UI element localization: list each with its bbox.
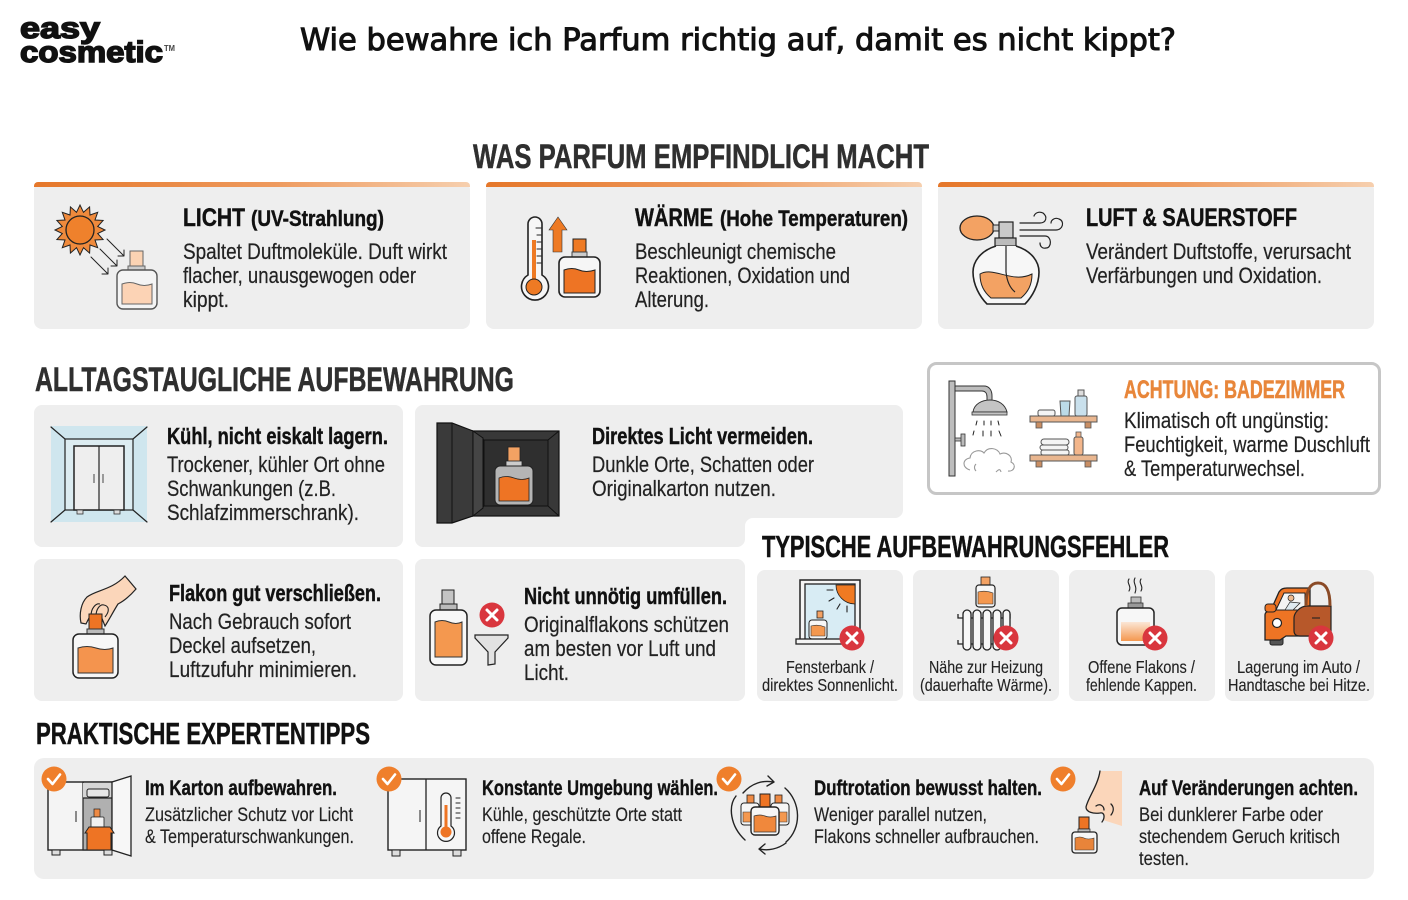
text: achtung badezimmer bbox=[1124, 376, 1370, 481]
logo bbox=[20, 12, 175, 69]
card: fensterbank bbox=[757, 570, 903, 701]
text: duftrotation: Duftrotation bewusst halten. bbox=[814, 776, 1042, 800]
text: auto und handtasche: Lagerung im Auto / bbox=[1237, 657, 1360, 677]
text: wärme: Reaktionen, Oxidation und bbox=[635, 263, 850, 288]
text: auf veränderungen achten: testen. bbox=[1139, 848, 1189, 870]
text: licht: flacher, unausgewogen oder bbox=[183, 263, 416, 288]
text: achtung badezimmer: & Temperaturwechsel. bbox=[1124, 456, 1305, 481]
icon: perfume atomizer bbox=[960, 212, 1063, 304]
icon: cabinet with thermometer bbox=[388, 779, 466, 856]
icon: cupboard with carton bbox=[48, 776, 131, 856]
icon: check bbox=[376, 766, 402, 792]
icon: thermometer and bottle bbox=[522, 217, 600, 300]
logo: cosmetic bbox=[20, 36, 163, 69]
text: kühl lagern: Trockener, kühler Ort ohne bbox=[167, 452, 385, 477]
text: im karton bbox=[145, 776, 354, 848]
icon: check bbox=[716, 766, 742, 792]
text: nicht umfüllen: Licht. bbox=[524, 660, 569, 685]
icon: nose and bottle bbox=[1072, 771, 1122, 853]
text: offene flakons bbox=[1086, 657, 1197, 695]
text: fensterbank: Fensterbank / bbox=[786, 657, 874, 677]
card: offene flakons bbox=[1069, 570, 1215, 701]
text: fensterbank bbox=[762, 657, 898, 695]
text: wärme: WÄRME bbox=[635, 204, 713, 232]
icon: wardrobe in room bbox=[51, 426, 147, 522]
icon: shelves bbox=[1030, 390, 1097, 467]
logo: easy bbox=[20, 12, 100, 45]
text: licht: kippt. bbox=[183, 287, 229, 312]
panel: expertentipps bbox=[34, 758, 1374, 879]
text: luft und sauerstoff: Verfärbungen und Oxidation. bbox=[1086, 263, 1322, 288]
title: Wie bewahre ich Parfum richtig auf, damit es nicht kippt? bbox=[300, 23, 1176, 58]
text: auf veränderungen achten bbox=[1139, 776, 1358, 870]
text: licht: LICHT bbox=[183, 204, 245, 232]
text: konstante umgebung bbox=[482, 776, 718, 848]
text: fensterbank: direktes Sonnenlicht. bbox=[762, 675, 898, 695]
text: wärme bbox=[635, 204, 908, 312]
text: achtung badezimmer: Klimatisch oft ungünstig: bbox=[1124, 408, 1329, 433]
icon: dark box with bottle bbox=[437, 423, 559, 523]
text: im karton: & Temperaturschwankungen. bbox=[145, 826, 354, 848]
heading: typische aufbewahrungsfehler: TYPISCHE AUFBEWAHRUNGSFEHLER bbox=[762, 529, 1169, 564]
icon: car and handbag bbox=[1265, 583, 1334, 650]
icon: window with sun and bottle bbox=[796, 580, 864, 650]
icon: shower bbox=[949, 381, 1014, 476]
text: im karton: Im Karton aufbewahren. bbox=[145, 776, 337, 800]
text: wärme: (Hohe Temperaturen) bbox=[720, 206, 908, 231]
text: direktes licht vermeiden: Dunkle Orte, Schatten oder bbox=[592, 452, 814, 477]
card: auto und handtasche bbox=[1225, 570, 1374, 701]
panel: luft und sauerstoff bbox=[938, 182, 1374, 329]
text: auto und handtasche bbox=[1228, 657, 1370, 695]
icon: check bbox=[1050, 766, 1076, 792]
text: auto und handtasche: Handtasche bei Hitze. bbox=[1228, 675, 1370, 695]
text: heizung: (dauerhafte Wärme). bbox=[920, 675, 1052, 695]
text: im karton: Zusätzlicher Schutz vor Licht bbox=[145, 804, 353, 826]
panel: direktes licht vermeiden bbox=[415, 405, 903, 547]
text: kühl lagern: Kühl, nicht eiskalt lagern. bbox=[167, 423, 388, 449]
text: auf veränderungen achten: stechendem Geruch kritisch bbox=[1139, 826, 1340, 848]
text: duftrotation bbox=[814, 776, 1042, 848]
text: flakon verschließen: Nach Gebrauch sofort bbox=[169, 609, 351, 634]
icon: open bottle bbox=[1117, 578, 1168, 650]
text: duftrotation: Flakons schneller aufbrauchen. bbox=[814, 826, 1039, 848]
text: kühl lagern: Schwankungen (z.B. bbox=[167, 476, 336, 501]
text: nicht umfüllen: am besten vor Luft und bbox=[524, 636, 716, 661]
heading: was parfum empfindlich macht: WAS PARFUM EMPFINDLICH MACHT bbox=[473, 138, 929, 176]
text: flakon verschließen bbox=[169, 580, 381, 682]
text: offene flakons: Offene Flakons / bbox=[1088, 657, 1195, 677]
tip: im karton bbox=[42, 766, 354, 856]
text: kühl lagern bbox=[167, 423, 388, 525]
callout: achtung badezimmer bbox=[928, 364, 1380, 494]
icon: rotating bottles bbox=[731, 776, 798, 854]
icon: hand closing bottle bbox=[73, 576, 136, 678]
card: heizung bbox=[913, 570, 1059, 701]
text: duftrotation: Weniger parallel nutzen, bbox=[814, 804, 987, 826]
text: nicht umfüllen: Originalflakons schützen bbox=[524, 612, 729, 637]
text: konstante umgebung: offene Regale. bbox=[482, 826, 586, 848]
icon: bottle on radiator bbox=[958, 577, 1018, 650]
text: konstante umgebung: Kühle, geschützte Orte statt bbox=[482, 804, 682, 826]
text: flakon verschließen: Luftzufuhr minimieren. bbox=[169, 657, 357, 682]
panel: nicht umfüllen bbox=[415, 559, 745, 701]
text: luft und sauerstoff: LUFT & SAUERSTOFF bbox=[1086, 204, 1297, 232]
text: nicht umfüllen bbox=[524, 583, 729, 685]
text: konstante umgebung: Konstante Umgebung wählen. bbox=[482, 776, 718, 800]
panel: kühl lagern bbox=[34, 405, 403, 547]
text: direktes licht vermeiden: Direktes Licht vermeiden. bbox=[592, 423, 813, 449]
heading: praktische expertentipps: PRAKTISCHE EXPERTENTIPPS bbox=[36, 716, 370, 751]
text: flakon verschließen: Deckel aufsetzen, bbox=[169, 633, 316, 658]
text: licht bbox=[183, 204, 447, 312]
text: licht: (UV-Strahlung) bbox=[251, 206, 384, 231]
logo: TM bbox=[164, 44, 175, 53]
panel: flakon verschließen bbox=[34, 559, 403, 701]
icon: check bbox=[42, 766, 66, 792]
text: wärme: Alterung. bbox=[635, 287, 709, 312]
text: direktes licht vermeiden: Originalkarton nutzen. bbox=[592, 476, 776, 501]
text: heizung: Nähe zur Heizung bbox=[929, 657, 1043, 677]
tip: auf veränderungen achten bbox=[1050, 766, 1358, 870]
text: flakon verschließen: Flakon gut verschließen. bbox=[169, 580, 381, 606]
text: wärme: Beschleunigt chemische bbox=[635, 239, 836, 264]
text: offene flakons: fehlende Kappen. bbox=[1086, 675, 1197, 695]
text: luft und sauerstoff bbox=[1086, 204, 1351, 288]
text: kühl lagern: Schlafzimmerschrank). bbox=[167, 500, 359, 525]
tip: konstante umgebung bbox=[376, 766, 718, 856]
panel: licht bbox=[34, 182, 470, 329]
text: heizung bbox=[920, 657, 1052, 695]
text: luft und sauerstoff: Verändert Duftstoffe, verursacht bbox=[1086, 239, 1351, 264]
panel: wärme bbox=[486, 182, 922, 329]
text: direktes licht vermeiden bbox=[592, 423, 814, 501]
tip: duftrotation bbox=[716, 766, 1042, 854]
text: nicht umfüllen: Nicht unnötig umfüllen. bbox=[524, 583, 727, 609]
text: licht: Spaltet Duftmoleküle. Duft wirkt bbox=[183, 239, 447, 264]
text: auf veränderungen achten: Bei dunklerer Farbe oder bbox=[1139, 804, 1323, 826]
icon: bottle and funnel bbox=[430, 590, 508, 665]
heading: alltagstaugliche aufbewahrung: ALLTAGSTAUGLICHE AUFBEWAHRUNG bbox=[35, 361, 514, 399]
icon: sun and bottle bbox=[55, 205, 157, 309]
